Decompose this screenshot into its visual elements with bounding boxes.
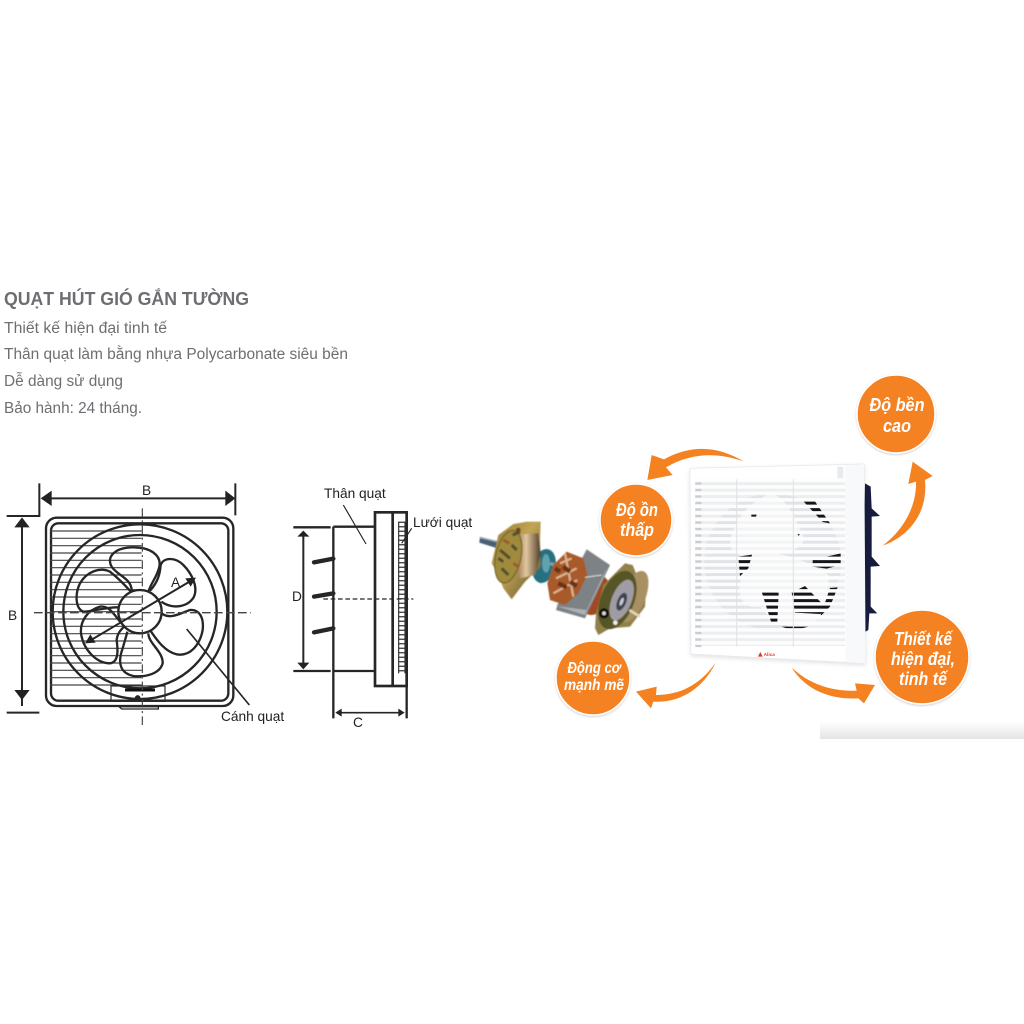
- label: Lưới quạt: Lưới quạt: [413, 515, 472, 530]
- callout: Độ ồn thấp: thấp: [620, 520, 654, 540]
- grille ticks: [399, 522, 405, 673]
- front panel: [690, 464, 865, 663]
- callout: Độ ồn thấp: Độ ồn: [616, 500, 658, 520]
- copper stator: [547, 552, 587, 605]
- label: B top: B: [142, 483, 151, 498]
- callout: Thiết kế hiện đại, tinh tế: [875, 610, 969, 704]
- heading: QUẠT HÚT GIÓ GẮN TƯỜNG: [4, 288, 249, 309]
- rear blue mounting: [862, 483, 880, 634]
- arrow: to Độ ồn thấp: [647, 449, 744, 480]
- callout: Độ bền cao: [857, 375, 935, 453]
- screws: [314, 559, 333, 632]
- arrow: to Độ bền cao: [883, 462, 933, 546]
- arrows and callouts: [556, 375, 969, 715]
- callout: Độ bền cao: Độ bền: [870, 395, 925, 415]
- background strip: [820, 722, 1024, 739]
- left bell housing: [492, 522, 541, 599]
- image: disassembled motor: [479, 522, 655, 635]
- callout: Động cơ mạnh mẽ: [556, 641, 630, 715]
- grille opening: [695, 479, 845, 646]
- callout: Thiết kế hiện đại, tinh tế: Thiết kế: [894, 629, 954, 649]
- diameter arrow A: [85, 578, 196, 643]
- fan circle: [704, 493, 841, 630]
- label: B side: B: [8, 608, 17, 623]
- line 1: Thiết kế hiện đại tinh tế: [4, 320, 167, 337]
- label: A: A: [171, 575, 181, 590]
- callout: Động cơ mạnh mẽ: Động cơ: [568, 660, 622, 677]
- arrow: to Thiết kế hiện đại: [792, 668, 875, 703]
- back copper winding: [575, 571, 615, 619]
- label: Cánh quạt: Cánh quạt: [221, 709, 284, 724]
- blue rotor: [529, 546, 559, 586]
- line 2: Thân quạt làm bằng nhựa Polycarbonate siêu bền: [4, 346, 348, 363]
- callout: Độ bền cao: cao: [883, 416, 911, 436]
- diagram: front view of fan: [7, 483, 284, 725]
- image: exhaust fan product photo: [690, 464, 880, 663]
- callout: Động cơ mạnh mẽ: mạnh mẽ: [564, 677, 624, 694]
- shaft: [479, 537, 507, 551]
- callout: Thiết kế hiện đại, tinh tế: hiện đại,: [891, 649, 955, 669]
- slats: [544, 479, 996, 647]
- label: C: C: [353, 715, 363, 730]
- line 4: Bảo hành: 24 tháng.: [4, 400, 142, 417]
- arrow: to Động cơ mạnh mẽ: [636, 663, 716, 708]
- callout: Thiết kế hiện đại, tinh tế: tinh tế: [899, 669, 949, 689]
- callout: Độ ồn thấp: [600, 484, 672, 556]
- grey bracket: [556, 549, 610, 618]
- brand logo: Alica: [764, 652, 775, 657]
- brand logo: [758, 652, 775, 657]
- line 3: Dễ dàng sử dụng: [4, 373, 123, 390]
- right bell housing: [595, 563, 646, 635]
- label: D: D: [292, 589, 302, 604]
- blades: [730, 493, 804, 557]
- slat edges: [689, 482, 707, 650]
- text block: product description: [4, 288, 348, 417]
- diagram: side view of fan: [292, 486, 472, 730]
- label: Thân quạt: Thân quạt: [324, 486, 386, 501]
- dark openings: [738, 492, 841, 631]
